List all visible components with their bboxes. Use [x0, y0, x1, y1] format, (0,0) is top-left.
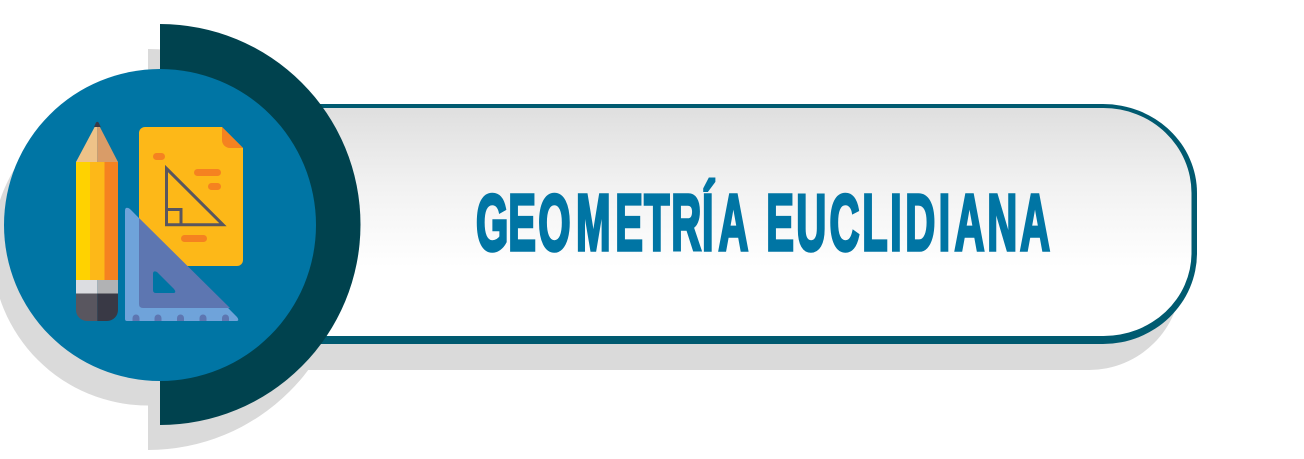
- drop shadow: circle: [0, 94, 304, 406]
- drop shadow: half circle: [148, 49, 348, 450]
- heading: GEOMETRÍA EUCLIDIANA: [476, 177, 1050, 268]
- panel: title banner: [200, 104, 1197, 344]
- blue circle: [4, 69, 316, 381]
- dark half circle: [160, 24, 360, 425]
- drop shadow: banner: [200, 130, 1181, 370]
- icon: set square ruler: [125, 208, 238, 321]
- icon: pencil: [76, 122, 118, 321]
- icon: paper sheet: [139, 127, 243, 266]
- icon: geometry tools: [76, 122, 243, 321]
